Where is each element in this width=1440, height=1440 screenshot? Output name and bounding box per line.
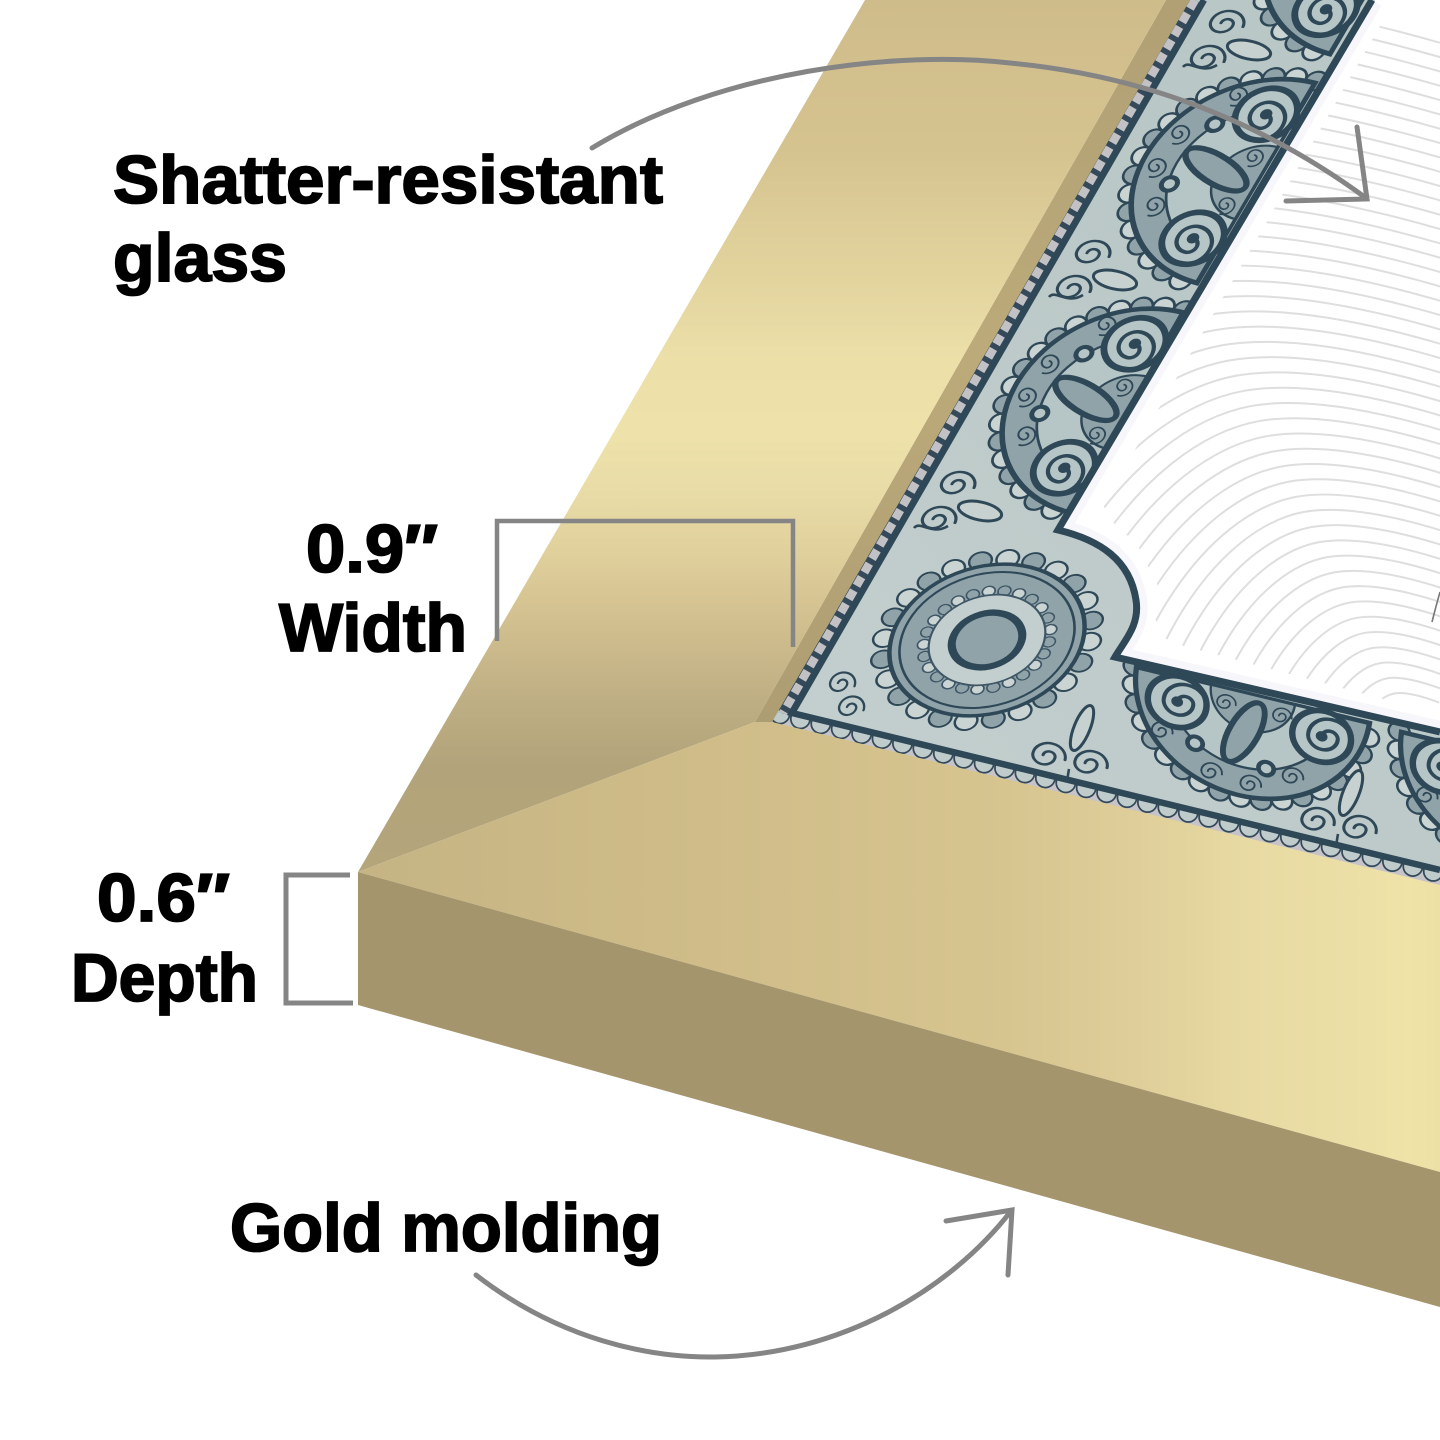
gold molding: left bar: [358, 0, 1166, 872]
heading: shatter-resistant glass: glass: [113, 220, 287, 296]
ornate half medallions on bottom border: [1119, 665, 1440, 891]
arrow: shatter-resistant glass: [592, 59, 1367, 201]
beaded outer border: [772, 0, 1440, 880]
artwork border panel: [760, 0, 1440, 891]
corner round medallion: [847, 539, 1127, 741]
depth label: [71, 860, 258, 1016]
depth label: 0.6″: [97, 860, 230, 936]
bracket: width: [497, 521, 793, 647]
label: gold molding: Gold molding: [230, 1190, 662, 1266]
ornate half medallions on left border: [956, 0, 1440, 515]
white mat with concentric line pattern: [1064, 0, 1440, 733]
gold molding: bottom bar: [358, 722, 1440, 1172]
inner dark border of artwork: [1058, 0, 1440, 732]
width label: [279, 511, 467, 666]
panel: gold frame corner with artwork: [358, 0, 1440, 1307]
gold molding: depth side: [358, 872, 1440, 1307]
depth label: Depth: [71, 940, 258, 1016]
gold molding: inner bevel: [755, 0, 1190, 722]
arrow: gold molding: [476, 1210, 1012, 1357]
width label: Width: [279, 590, 467, 666]
heading: shatter-resistant glass: Shatter-resistant: [113, 142, 663, 218]
spiral and ellipse ornaments: [828, 8, 1379, 854]
bracket: depth: [286, 875, 353, 1003]
heading: shatter-resistant glass: [113, 142, 663, 296]
width label: 0.9″: [306, 511, 438, 587]
